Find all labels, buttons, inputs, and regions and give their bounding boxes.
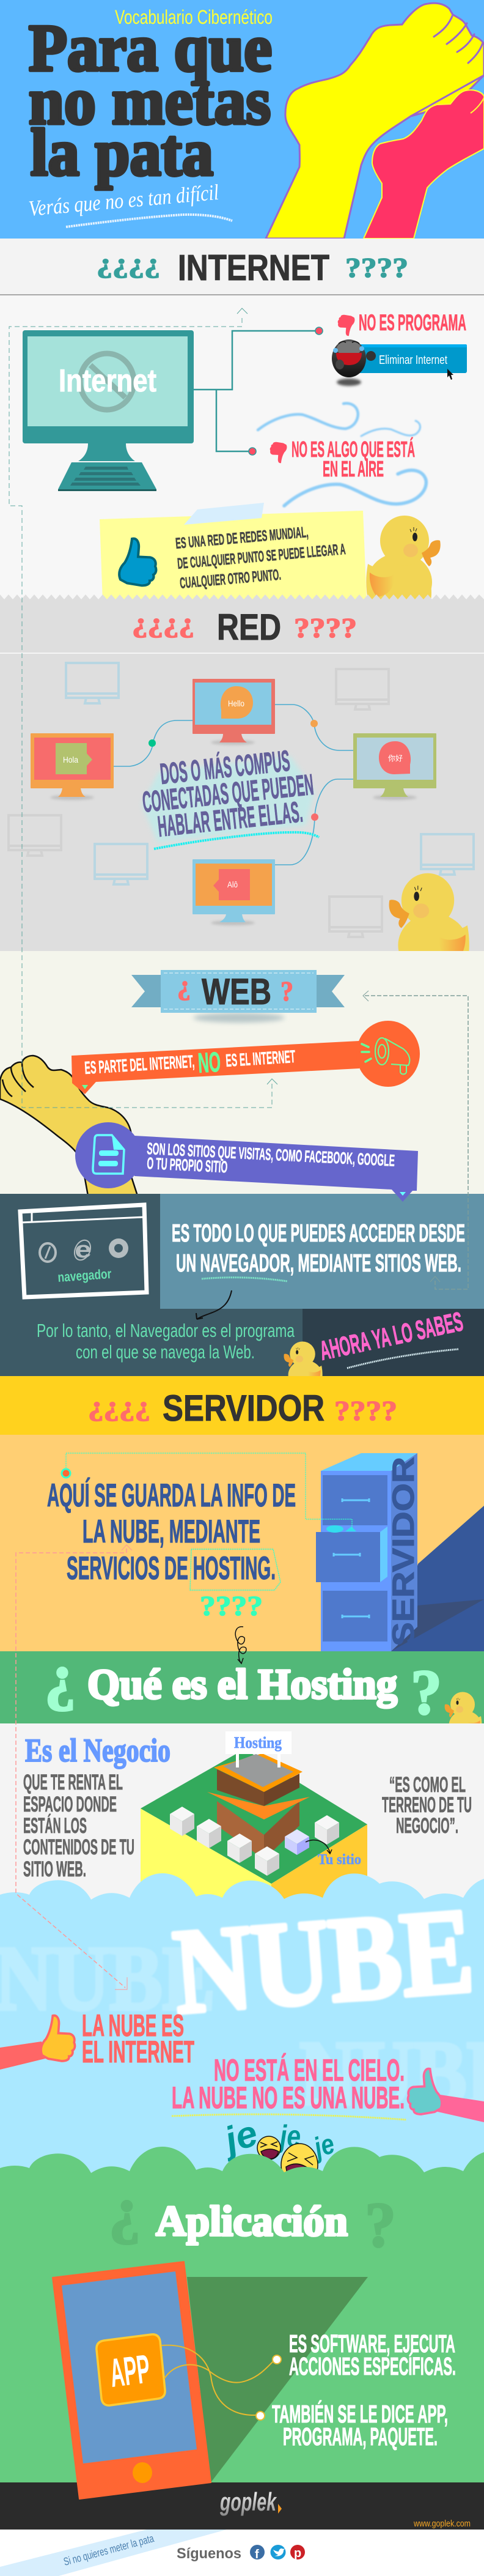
chalk underline xyxy=(66,215,232,227)
text: negocio: ESPACIO DONDE xyxy=(23,1793,117,1816)
heading: SERVIDOR xyxy=(88,1388,397,1429)
panel: aplicación xyxy=(0,2147,484,2499)
icon: yellow thumb xyxy=(41,2016,75,2061)
connectors xyxy=(161,2345,281,2420)
text: dos o más compus xyxy=(141,744,315,843)
icon: computer monitor: Internet xyxy=(59,363,156,399)
icon: document xyxy=(93,1135,124,1174)
laughing je je je xyxy=(215,2112,339,2186)
panel: nube xyxy=(0,1873,484,2186)
icon: teal thumb xyxy=(408,2069,442,2114)
heading: INTERNET xyxy=(97,247,408,288)
heading: Aplicación: ? xyxy=(365,2189,396,2260)
text: la nube es el internet: LA NUBE ES xyxy=(82,2008,184,2043)
phone xyxy=(53,2262,211,2499)
text: negocio: ESTÁN LOS xyxy=(23,1813,87,1838)
website: www.goplek.com xyxy=(413,2519,471,2529)
panel: red xyxy=(0,594,484,990)
panel: hosting header: ? xyxy=(411,1656,442,1728)
isometric hosting illustration xyxy=(141,1731,367,1905)
text: la nube es el internet: EL INTERNET xyxy=(82,2035,194,2069)
dotted connector with node xyxy=(62,1453,352,1529)
text: aquí se guarda: LA NUBE, MEDIANTE xyxy=(82,1514,260,1550)
banner: son los sitios: O TU PROPIO SITIO xyxy=(147,1154,228,1176)
note: red de redes xyxy=(100,503,367,602)
main title xyxy=(29,11,272,190)
note text: CUALQUIER OTRO PUNTO. xyxy=(179,566,282,592)
heading: Aplicación: Aplicación xyxy=(156,2198,348,2245)
panel: hosting header: ¿ xyxy=(45,1640,76,1712)
panel: footer bar xyxy=(0,2482,484,2530)
button: Eliminar Internet: Eliminar Internet xyxy=(379,353,447,367)
laughing je je je: je xyxy=(215,2112,262,2163)
icon: facebook xyxy=(250,2545,265,2561)
chalk underline xyxy=(202,1278,287,1281)
heading: RED: ???? xyxy=(294,612,357,643)
heading: SERVIDOR: ???? xyxy=(334,1395,397,1426)
tape text: Si no quieres meter la pata xyxy=(62,2532,156,2568)
panel: web xyxy=(0,951,484,1202)
text: negocio xyxy=(23,1771,134,1881)
laughing je je je: je xyxy=(307,2127,339,2164)
text: la nube es el internet xyxy=(82,2008,194,2069)
button: Eliminar Internet xyxy=(358,344,467,380)
network connections xyxy=(114,705,353,865)
heading: INTERNET: ¿¿¿¿ xyxy=(97,247,160,278)
ghost monitors xyxy=(9,663,474,937)
icon: yellow foot xyxy=(266,3,484,239)
heading: Es el Negocio: Es el Negocio xyxy=(25,1732,170,1769)
heading: Aplicación: ¿ xyxy=(109,2174,141,2245)
connection dots xyxy=(148,720,318,821)
icon: blue thumb up xyxy=(119,539,156,585)
icon: thumb down 2 xyxy=(270,442,287,463)
label: Tu sitio: Tu sitio xyxy=(318,1852,361,1868)
dashed connector: servidor to nube xyxy=(16,1545,132,1989)
text: dos o más compus: DOS O MÁS COMPUS xyxy=(159,744,292,791)
text: negocio: CONTENIDOS DE TU xyxy=(23,1835,134,1859)
icon: pinterest: p xyxy=(294,2547,301,2560)
icon: computer monitor xyxy=(23,330,194,491)
heading: SERVIDOR: SERVIDOR xyxy=(163,1388,324,1429)
chalk underline xyxy=(154,832,319,849)
app icon: APP xyxy=(108,2346,152,2396)
arrow: curly black xyxy=(196,1290,232,1319)
text: negocio: SITIO WEB. xyxy=(23,1857,86,1881)
server cabinet xyxy=(316,1453,420,1651)
arm: red xyxy=(0,2041,48,2070)
icon: twitter xyxy=(270,2545,286,2559)
panel: navegador xyxy=(0,1194,484,1396)
duck 1 xyxy=(366,516,441,623)
text: no está en el cielo xyxy=(172,2053,405,2115)
phone shadow xyxy=(187,2277,368,2482)
text: aquí se guarda: SERVICIOS DE HOSTING. xyxy=(67,1550,276,1586)
browser icons: e xyxy=(75,1237,92,1263)
arm: pink xyxy=(435,2095,484,2122)
monitor: 你好 xyxy=(353,733,436,800)
text: NO ES ALGO QUE ESTÁ EN EL AIRE: EN EL AIRE xyxy=(323,456,384,481)
arrow: to tu sitio xyxy=(306,1840,332,1854)
heading: RED: ¿¿¿¿ xyxy=(132,607,194,638)
side label: SERVIDOR xyxy=(386,1457,420,1646)
monitor: Hello xyxy=(193,679,275,745)
panel: hosting header xyxy=(0,1651,484,1723)
banner: es parte del internet xyxy=(72,1021,420,1094)
icon: thumb down 1 xyxy=(338,315,354,336)
banner: es parte del internet: ES PARTE DEL INTERNET, xyxy=(84,1052,195,1078)
panel: hosting xyxy=(0,1723,484,1907)
dashed connector: web to browser xyxy=(363,991,468,1289)
heading: SERVIDOR: ¿¿¿¿ xyxy=(88,1390,150,1421)
decoration: wind swirls xyxy=(258,404,426,506)
browser icons xyxy=(40,1237,128,1263)
ribbon heading xyxy=(131,969,345,1023)
main title: no metas xyxy=(29,64,271,138)
text: por lo tanto xyxy=(37,1320,295,1363)
connector lines xyxy=(194,327,323,455)
dotted hosting highlight xyxy=(190,1549,280,1590)
question marks: ???? xyxy=(200,1590,263,1621)
monitor: Alô xyxy=(193,859,275,925)
icon: megaphone xyxy=(362,1038,409,1074)
faces xyxy=(257,2136,318,2186)
dashed connector: internet to web xyxy=(9,308,277,1108)
banner: son los sitios xyxy=(75,1122,418,1202)
text: por lo tanto: Por lo tanto, el Navegador es el programa xyxy=(37,1320,295,1341)
browser window xyxy=(20,1205,147,1297)
text: también se le dice xyxy=(272,2400,448,2451)
monitor: 你好: 你好 xyxy=(388,754,403,763)
icon: pinterest xyxy=(290,2545,305,2560)
sign: Hosting: Hosting xyxy=(234,1734,282,1752)
text: negocio: QUE TE RENTA EL xyxy=(23,1771,123,1794)
arrow: squiggle xyxy=(235,1627,246,1664)
heading: INTERNET: ???? xyxy=(345,252,408,283)
label: navegador: navegador xyxy=(57,1266,112,1285)
laughing je je je: je xyxy=(277,2119,301,2153)
sign: Hosting xyxy=(226,1731,292,1754)
ribbon heading: WEB xyxy=(202,971,271,1012)
text: aquí se guarda xyxy=(47,1477,296,1586)
building xyxy=(207,1753,310,1859)
cubes xyxy=(170,1807,339,1876)
monitor: Hola xyxy=(31,733,114,800)
panel: internet xyxy=(0,239,484,623)
heading: Aplicación xyxy=(109,2174,396,2260)
heading: INTERNET: INTERNET xyxy=(178,248,329,288)
text: accede desde navegador xyxy=(172,1219,465,1277)
panel: servidor xyxy=(0,1376,484,1651)
duck 2 xyxy=(389,873,469,990)
text: NO ES ALGO QUE ESTÁ EN EL AIRE xyxy=(292,437,415,481)
ghost word NUBE left: NUBE xyxy=(0,1928,215,2029)
kicker: Vocabulario Cibernético: Vocabulario Cibernético xyxy=(115,6,273,28)
cabinet shadow xyxy=(391,1506,484,1651)
note text xyxy=(175,524,346,592)
icon: red foot xyxy=(364,90,484,239)
heading: RED xyxy=(132,607,357,648)
logo: goplek: goplek xyxy=(219,2487,277,2516)
quote xyxy=(382,1773,472,1838)
note text: ES UNA RED DE REDES MUNDIAL, xyxy=(175,524,309,552)
text: Síguenos: Síguenos xyxy=(177,2545,241,2562)
main title: la pata xyxy=(31,116,213,190)
panel: header xyxy=(0,0,484,239)
banner: es parte del internet: ES EL INTERNET xyxy=(225,1047,296,1071)
main title: Para que xyxy=(29,11,272,85)
chalk underline xyxy=(172,2114,406,2120)
chalk underline xyxy=(347,1349,458,1368)
tape xyxy=(0,2530,227,2576)
icon: crying emoticon xyxy=(332,339,376,386)
banner: es parte del internet: NO xyxy=(197,1046,222,1079)
text: es software xyxy=(289,2330,456,2380)
icon: facebook: f xyxy=(255,2548,259,2561)
panel: hosting header: Qué es el Hosting xyxy=(87,1661,397,1708)
tape xyxy=(184,503,264,525)
subtitle script: Verás que no es tan difícil xyxy=(28,180,220,221)
heading: RED: RED xyxy=(217,607,281,648)
monitor: Hello: Hello xyxy=(228,698,244,708)
app icon xyxy=(97,2334,165,2405)
panel: follow bar xyxy=(0,2530,484,2576)
ribbon heading: ? xyxy=(280,975,293,1007)
text: por lo tanto: con el que se navega la Web. xyxy=(76,1341,255,1363)
monitor: Hola: Hola xyxy=(63,755,78,764)
monitor: Alô: Alô xyxy=(227,879,238,889)
ribbon heading: ¿ xyxy=(177,969,191,1001)
